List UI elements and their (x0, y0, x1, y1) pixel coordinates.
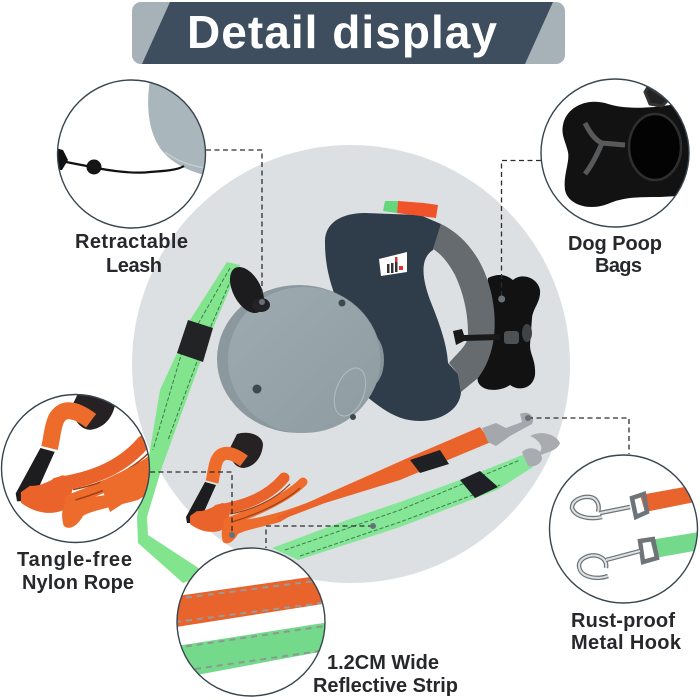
orange leash (277, 413, 533, 521)
icon: dog poop bag holder (478, 275, 540, 390)
cuff (177, 320, 213, 362)
buttons (383, 201, 438, 218)
brand label (379, 252, 407, 276)
handle grip (433, 224, 495, 392)
label: retractable leash (75, 231, 188, 277)
label: retractable leash: Leash (106, 255, 162, 277)
label: reflective strip: Reflective Strip (313, 675, 458, 697)
label: dog poop bags: Dog Poop (568, 233, 662, 255)
title banner: Detail display (187, 6, 497, 58)
label: reflective strip (313, 652, 458, 697)
label: tangle-free nylon rope (17, 549, 134, 594)
label: metal hook: Metal Hook (571, 632, 682, 654)
reel disc (217, 285, 384, 433)
product: retractable dual leash (137, 201, 560, 583)
panel: retractable leash detail (55, 80, 215, 228)
panel: reflective strip detail (170, 548, 335, 696)
label: metal hook: Rust-proof (571, 610, 675, 632)
label: tangle-free nylon rope: Tangle-free (17, 549, 132, 571)
label: dog poop bags: Bags (595, 255, 642, 277)
label: metal hook (571, 610, 682, 654)
green leash, right (272, 433, 560, 560)
folded orange strap (186, 433, 322, 543)
panel: metal hook detail (550, 455, 700, 603)
label: reflective strip: 1.2CM Wide (327, 652, 439, 674)
strap (453, 329, 500, 345)
label: retractable leash: Retractable (75, 231, 188, 253)
green leash, left (137, 262, 240, 583)
handle body (325, 213, 461, 421)
background circle (132, 145, 570, 583)
panel: tangle-free nylon rope detail (0, 394, 150, 544)
label: tangle-free nylon rope: Nylon Rope (22, 572, 134, 594)
title banner (132, 2, 565, 64)
panel: dog poop bags detail (541, 79, 695, 227)
label: dog poop bags (568, 233, 662, 277)
clip on leash (223, 261, 271, 319)
dashed leaders (150, 150, 629, 548)
